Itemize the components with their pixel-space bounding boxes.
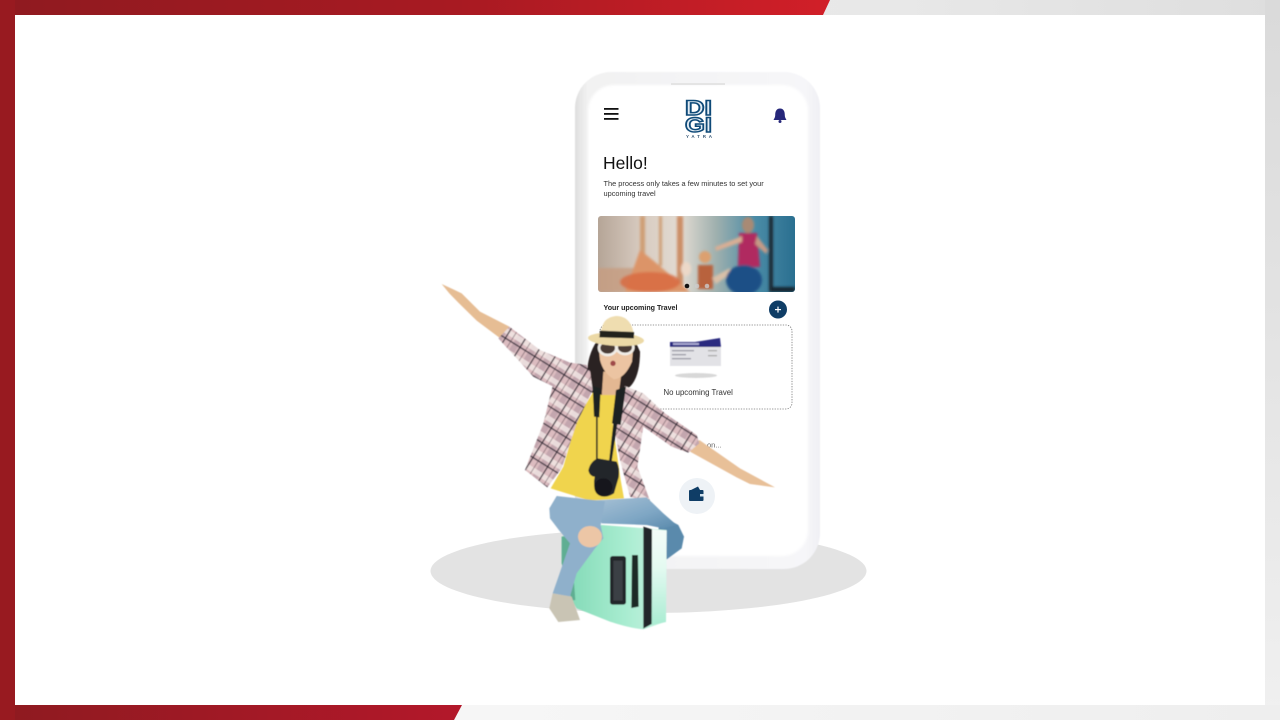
phone screen [588,85,808,556]
knee skin through ripped jeans [578,526,602,547]
text: no upcoming travel: No upcoming Travel [664,388,733,397]
logo: Digi Yatra [685,97,713,139]
icon: add button [769,300,787,318]
phone body [575,72,820,569]
text: intro [604,179,764,198]
right side of shirt and sleeve [613,386,699,503]
sunglasses [599,341,633,355]
icon: wallet button [679,478,715,514]
heading: Hello: Hello! [603,153,648,173]
shoe [549,593,580,622]
jeans: left thigh and shin [549,496,605,597]
camera strap [593,386,626,462]
frame: right grey bar [1265,0,1280,720]
woman sitting on suitcase [442,284,775,629]
neck [602,372,622,397]
phone notch line [671,83,725,85]
logo: Digi Yatra: YATRA [686,134,713,139]
camera [588,458,619,497]
text: intro: upcoming travel [604,189,656,198]
icon: ticket [670,338,721,378]
hat [588,316,644,347]
photo banner [598,216,795,295]
logo: Digi Yatra: DI [685,97,712,120]
logo: Digi Yatra: GI [685,114,712,137]
card: no upcoming travel [600,325,792,409]
heading: your upcoming travel: Your upcoming Travel [604,304,678,312]
frame: top red bar [0,0,1280,15]
text: intro: The process only takes a few minutes to set your [604,179,764,188]
phone mockup [575,72,820,569]
yellow top [551,392,624,501]
mouth [610,361,616,366]
suitcase [562,525,667,629]
face [598,338,634,379]
right calf [657,515,684,559]
jeans: right thigh [590,497,677,528]
left hand and forearm [442,284,509,339]
text: partial label: on... [707,440,722,450]
left sleeve [498,327,593,387]
right forearm and hand [690,440,775,487]
hair [587,337,640,395]
icon: bell [774,108,786,123]
ground shadow ellipse [430,529,866,613]
icon: hamburger menu [604,108,618,120]
frame: bottom bar [0,705,1280,720]
frame: left red bar [0,0,15,720]
left side of shirt [525,363,593,487]
